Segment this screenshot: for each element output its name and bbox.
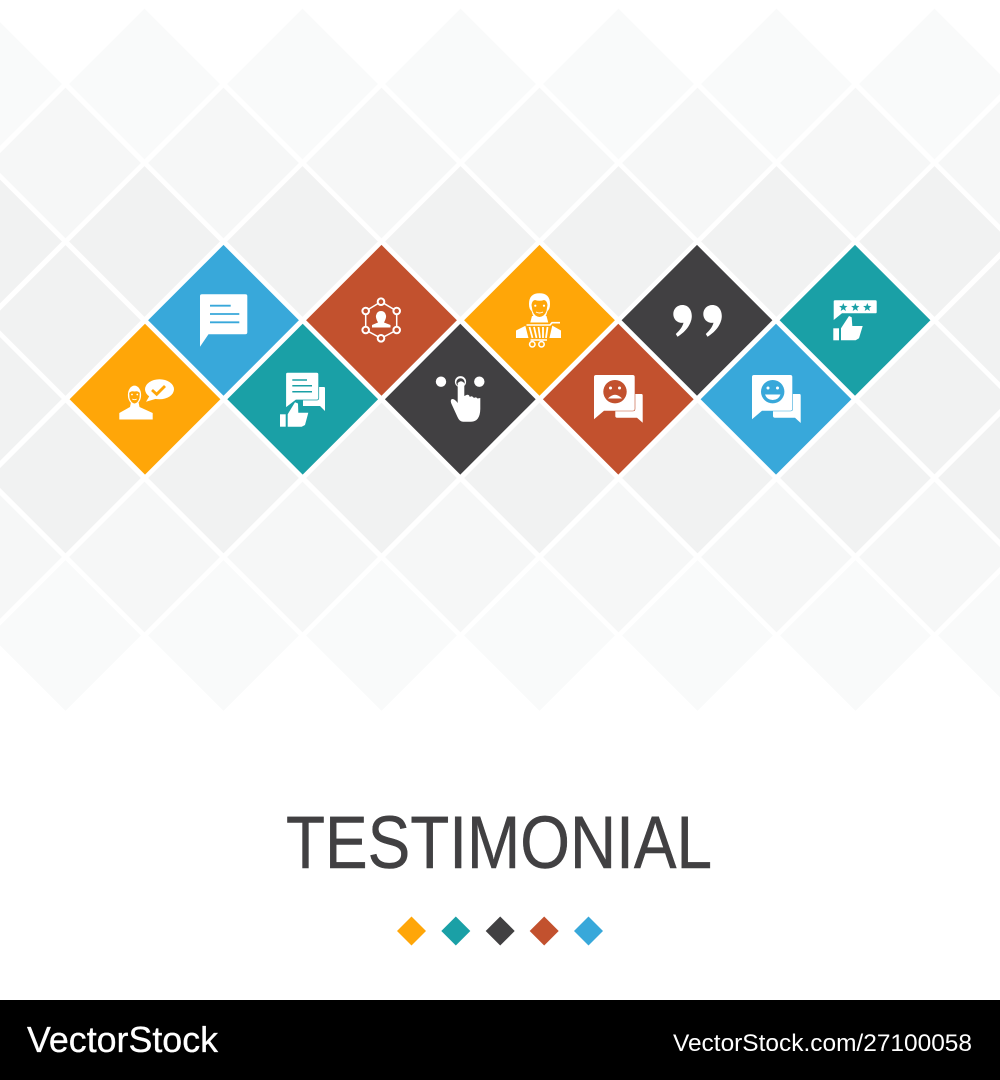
footer bar [0, 1000, 1000, 1080]
icon: chat bubble with sad face [594, 375, 643, 423]
footer image id: VectorStock.com/27100058 [673, 1030, 972, 1057]
footer brand: VectorStock [27, 1019, 219, 1060]
icon: speech bubble with lines [200, 294, 247, 347]
icon: hand tapping dots [436, 376, 484, 422]
legend: colored diamonds row [397, 916, 603, 946]
panel: red-brown diamond, negative feedback [543, 324, 694, 475]
panel: dark diamond, touch gesture [385, 324, 536, 475]
panel: teal diamond, review with thumbs up [227, 324, 378, 475]
icon: person with check bubble [119, 379, 174, 420]
title: TESTIMONIAL [286, 801, 712, 884]
panel: dark diamond, quotation marks [622, 245, 772, 396]
panel: orange diamond, person with check speech bubble [70, 324, 220, 475]
panel: blue diamond, positive feedback [701, 324, 851, 475]
panel: orange diamond, customer with shopping cart [464, 245, 615, 396]
icon: closing quote marks [673, 305, 722, 337]
icon: chat bubble with smiley [752, 375, 801, 423]
icon: rating bubble with thumb up [833, 300, 877, 340]
panel: red-brown diamond, customer network [306, 245, 457, 396]
panel: blue diamond, text bubble [148, 245, 299, 396]
icon: bubbles and thumb up [280, 372, 325, 427]
background diamond pattern [0, 9, 1000, 711]
panel: teal diamond, star rating [780, 245, 930, 396]
icon: man with cart [516, 293, 561, 347]
icon: person in circle of nodes [362, 298, 400, 342]
